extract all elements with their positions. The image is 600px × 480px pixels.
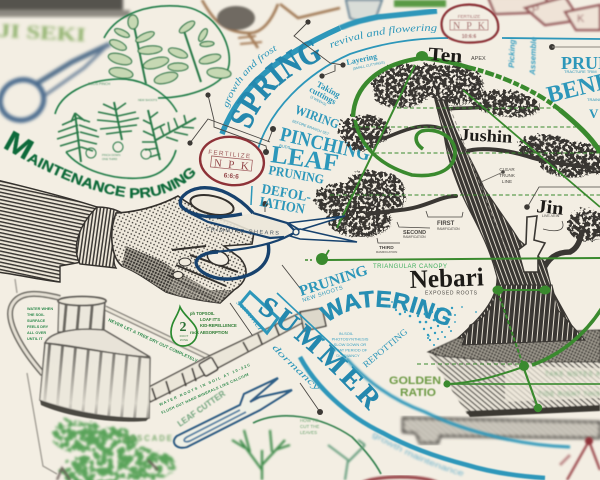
- hand holding shears: [112, 192, 254, 303]
- label: leaf cutter: LEAF CUTTER: [176, 389, 227, 429]
- leaf plant left: [107, 15, 179, 86]
- triangular canopy lines: [305, 65, 600, 408]
- roots: [462, 285, 585, 345]
- bottom notes left: [300, 418, 319, 435]
- soil: [428, 330, 600, 362]
- red NPK chart boxes top right: P: [532, 4, 539, 16]
- watering can notes: SURFACE: [27, 319, 46, 323]
- cascade tree: [52, 419, 176, 480]
- photosynthesis note: IN-SOIL: [339, 331, 354, 336]
- heading: Maintenance Pruning: MAINTENANCE PRUNING: [3, 130, 196, 199]
- dashed trunk axis: [450, 108, 512, 262]
- pine notes: PINCH DOWN: [102, 153, 120, 157]
- watering can notes: NEVER LET A TREE DRY OUT COMPLETELY: [108, 317, 199, 363]
- heading: Summer: SUMMER: [258, 298, 378, 411]
- thin teal tick: [251, 186, 252, 205]
- label: Jushin: Jushin: [460, 125, 513, 147]
- tree labels: [373, 44, 600, 297]
- cuff: [76, 207, 132, 268]
- label: exposed roots: EXPOSED ROOTS: [425, 290, 478, 296]
- red stamp top: Fertilize NPK 10:6:6: 10:6:6: [462, 34, 476, 40]
- label: defoliation: IATION: [258, 195, 306, 218]
- watering can notes: WATER ROOTS IN SOIL AT 10-22C: [159, 363, 251, 407]
- foliage: right of jin: [568, 210, 600, 242]
- photosynthesis note: WHAT PERIOD OF: [333, 348, 368, 352]
- label: second branch: RAMIFICATION: [403, 235, 426, 239]
- bonsai foliage: [315, 64, 600, 242]
- red stamp top: Fertilize NPK 10:6:6: FERTILIZE: [458, 14, 480, 19]
- label: first branch: FIRST: [437, 221, 455, 227]
- golden spiral: [355, 120, 455, 176]
- label: dormancy: dormancy: [272, 346, 320, 389]
- label: Jin: [524, 187, 600, 231]
- label: summer script: summer: [236, 301, 262, 330]
- bottom notes left: CUT THE: [300, 424, 319, 429]
- growth and frost script: growth and frost: [224, 46, 277, 109]
- neck: [58, 300, 105, 332]
- heading: Spring: SPRING: [231, 40, 321, 128]
- top left dark header band: [0, 0, 130, 17]
- icon: 2 water drop: 2: [180, 320, 186, 335]
- picking and assemble vertical labels: [507, 36, 538, 76]
- pine sprig 3: [142, 110, 196, 160]
- pine sprig 2: [97, 102, 139, 140]
- label: cascade: CASCADE: [122, 434, 173, 443]
- bottom arcs: green: [253, 416, 381, 474]
- inner spring arc: [258, 38, 600, 149]
- bottom green tree: [232, 430, 290, 480]
- leaf cutter: [174, 378, 292, 448]
- watering can notes: ALL OVER: [27, 331, 46, 335]
- drop notes: [190, 311, 237, 335]
- pine notes: [86, 82, 157, 161]
- red NPK chart boxes top right: [488, 0, 600, 30]
- label: wiring: BEFORE BRANCH SET: [292, 119, 330, 137]
- pine sprig 1: [57, 113, 99, 162]
- lower outer arcs: [300, 357, 570, 478]
- sprinkler rose: [300, 308, 326, 331]
- label: Jin: Jin: [535, 196, 565, 220]
- pine notes: NEW SHOOTS: [138, 98, 157, 102]
- dome: [45, 329, 150, 357]
- red stamp: Fertilize NPK 6:6:6: FERTILIZE: [208, 149, 250, 160]
- circle: broadleaf pruning: [104, 6, 231, 98]
- drop notes: KID-REPELLENCE: [200, 323, 237, 328]
- watering can notes: UNTIL IT: [27, 337, 43, 341]
- summer season band: [236, 290, 378, 411]
- trimming shears: [180, 188, 357, 279]
- foliage: crown: [373, 64, 484, 108]
- photosynthesis note: DORMANCY: [336, 353, 360, 358]
- pot notes: TIDE RIGHT THIS: [538, 392, 600, 398]
- bonsai branches: [360, 106, 593, 272]
- label: pinching: PINCHING: [278, 123, 373, 166]
- bonsai stand: [403, 418, 600, 443]
- icon: 2 water drop: [171, 307, 197, 346]
- cascade pot line: [57, 460, 158, 480]
- watering can notes: WATER WHEN: [27, 307, 53, 311]
- label: Ten apex: APEX: [471, 56, 486, 62]
- top centre blue pot and green bar: [346, 0, 446, 21]
- label: defoliation: [258, 182, 312, 218]
- foliage: upper right branch: [470, 87, 542, 121]
- red stamp: Fertilize NPK 6:6:6: 6:6:6: [223, 172, 239, 181]
- top right labels: pruning, bending: V: [589, 106, 599, 121]
- body fade: [40, 343, 150, 418]
- green nodes: [316, 51, 550, 412]
- photosynthesis note: PHOTOSYNTHESIS: [332, 336, 369, 342]
- picking and assemble vertical labels: Picking: [507, 39, 517, 68]
- watering can notes: [27, 307, 251, 415]
- label: wiring: WIRING: [293, 102, 341, 132]
- pine notes: BUDS PINCH: [88, 82, 111, 86]
- water spray dots: [387, 301, 477, 346]
- label: third branch: THIRD: [379, 245, 394, 251]
- label: repotting: REPOTTING: [361, 326, 410, 370]
- pot body highlight: [505, 366, 600, 402]
- drop notes: LOAF IT'S: [200, 317, 220, 322]
- watering can notes: FLUSH OUT HARD MINERALS LIKE CALCIUM: [161, 373, 249, 415]
- drop notes: ph TOPSOIL: [190, 311, 215, 316]
- top right connector: [552, 46, 600, 48]
- bottom tree thin: [328, 440, 365, 480]
- label: taking cuttings: [306, 77, 343, 111]
- pot notes: TAKE NOTES A: [545, 372, 600, 378]
- spring task labels: [258, 52, 385, 218]
- icon: 2 water drop: ZONE: [180, 338, 188, 342]
- revival and flowering script: revival and flowering: [330, 24, 437, 48]
- label: Ten apex: Ten: [428, 44, 464, 67]
- body: [40, 343, 150, 418]
- bonsai pot and table: [428, 330, 600, 417]
- bottom notes left: LEAVES: [300, 430, 317, 435]
- photosynthesis note: SLOW DOWN OR: [334, 342, 366, 347]
- photosynthesis note: [332, 331, 369, 358]
- circle: pine pruning: [55, 79, 196, 178]
- foliage: right lower branch: [519, 135, 600, 178]
- dark connector lines: [190, 22, 343, 412]
- label: second branch: SECOND: [403, 230, 426, 236]
- red NPK chart boxes top right: K: [577, 13, 585, 25]
- icon: 2 water drop: ROOT: [180, 334, 188, 338]
- top right labels: pruning, bending: TRACTURE TRIM: [564, 69, 597, 74]
- label: leaf pruning: LEAF: [269, 141, 340, 177]
- heading: Watering: WATERING: [318, 290, 452, 325]
- label: taking cuttings: (3 WEEKS): [309, 95, 327, 107]
- label: golden ratio: RATIO: [400, 387, 436, 399]
- label: third branch: RAMIFICATION: [376, 250, 397, 254]
- label: golden ratio: GOLDEN: [389, 375, 441, 387]
- picking and assemble vertical labels: Assemble: [528, 36, 538, 76]
- bottom red lines: [560, 438, 600, 480]
- label: clear trunk line: CLEAR: [499, 167, 515, 172]
- pine notes: ONE THIRD: [102, 157, 117, 161]
- red stamp top: Fertilize NPK 10:6:6: [442, 5, 498, 42]
- watering can: [10, 294, 326, 422]
- pruning new shoots: NEW SHOOTS: [302, 285, 344, 304]
- label: taking cuttings: Taking: [315, 79, 343, 100]
- red stamp: Fertilize NPK 6:6:6: [197, 133, 267, 189]
- pot base band: [466, 405, 600, 417]
- label: pinching: BUDS: [279, 143, 291, 150]
- outer spring arc: [222, 28, 340, 134]
- label: first branch: RAMIFICATION: [437, 227, 460, 231]
- label: first branch: [426, 211, 463, 231]
- label: optional text along lower arc: growth maintenance: [371, 432, 464, 477]
- leaf plant right: [167, 19, 231, 82]
- watering can notes: THE SOIL: [27, 313, 45, 317]
- label: clear trunk line: TRUNK: [499, 173, 516, 178]
- pot notes: [538, 372, 600, 398]
- watering can notes: FEELS DRY: [27, 325, 49, 329]
- pruning new shoots: PRUNING: [297, 263, 370, 300]
- label: clear trunk line: LINE: [502, 179, 512, 184]
- label: second branch: [397, 222, 430, 239]
- label: Nebari: Nebari: [409, 262, 484, 294]
- fingers: [168, 246, 238, 300]
- red stamp: Fertilize NPK 6:6:6: NPK: [213, 157, 249, 173]
- bottom notes left: HOW TO: [300, 418, 319, 423]
- red stamp top: Fertilize NPK 10:6:6: NPK: [453, 21, 486, 32]
- label: taking cuttings: cuttings: [308, 84, 339, 107]
- foliage: lower left branch: [315, 171, 406, 238]
- label: Jin: LIVE-VEIN: [542, 214, 560, 218]
- label: golden ratio: [389, 375, 441, 399]
- sleeve: [0, 180, 132, 282]
- bottom red stamp: [360, 477, 440, 480]
- shears label: TRIMMING SHEARS: [206, 227, 279, 237]
- bonsai trunk: [435, 100, 585, 345]
- spout: [147, 313, 304, 402]
- drop notes: rock ABSORPTION: [190, 330, 228, 335]
- grey guide lines: [15, 279, 57, 474]
- connector nodes: [187, 19, 555, 415]
- label: leaf pruning: PRUNING: [267, 162, 325, 187]
- label: defoliation: DEFOL-: [260, 182, 312, 206]
- label: layering: [346, 52, 385, 71]
- label: triangular canopy: TRIANGULAR CANOPY: [373, 264, 447, 270]
- icon: top left scissors: [0, 44, 110, 126]
- top brown creature drawing: [202, 0, 340, 48]
- label: third branch: [376, 238, 400, 254]
- label: Ten apex: [428, 44, 486, 67]
- pot body: [428, 353, 600, 414]
- small tick: [320, 333, 323, 341]
- foliage: left branch: [339, 115, 391, 152]
- label: layering: Layering: [346, 52, 378, 67]
- shaded palm: [122, 246, 176, 292]
- label: layering: (SMALL CUTTINGS): [352, 60, 385, 71]
- jin deadwood: [518, 216, 545, 272]
- green canopy arc: [353, 58, 600, 365]
- label: clear trunk line: [481, 167, 516, 184]
- outer arc top: [340, 11, 437, 28]
